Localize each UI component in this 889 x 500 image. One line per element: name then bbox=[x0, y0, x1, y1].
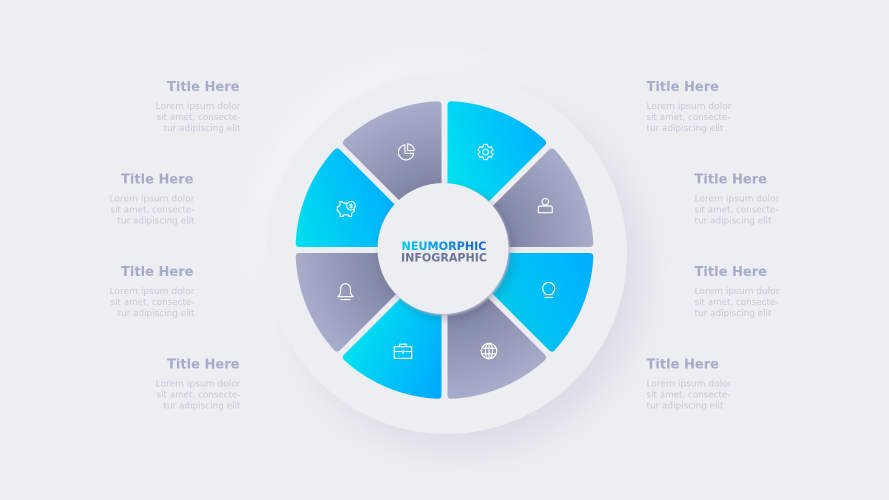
text block: right 3 bbox=[694, 265, 780, 319]
text block: left 4: sit amet, consecte- bbox=[156, 390, 240, 400]
text block: right 4 bbox=[646, 358, 732, 412]
text block: right 1: Lorem ipsum dolor bbox=[646, 102, 732, 112]
text block: left 3 bbox=[110, 265, 195, 319]
text block: right 4: Title Here bbox=[646, 358, 719, 372]
center title bbox=[401, 240, 487, 265]
text block: right 3: tur adipiscing elit bbox=[694, 309, 772, 319]
text block: right 4: Lorem ipsum dolor bbox=[646, 380, 732, 390]
text block: right 2: Title Here bbox=[694, 172, 767, 188]
text block: left 4 bbox=[156, 358, 241, 412]
center title: INFOGRAPHIC bbox=[401, 252, 487, 265]
text block: left 2: Lorem ipsum dolor bbox=[110, 194, 195, 204]
text block: right 2: tur adipiscing elit bbox=[694, 216, 772, 226]
text block: right 2: sit amet, consecte- bbox=[694, 206, 778, 216]
text block: right 2 bbox=[694, 172, 780, 226]
center title: NEUMORPHIC bbox=[402, 240, 486, 253]
icon: piggy bank bbox=[337, 201, 355, 216]
text block: left 1: sit amet, consecte- bbox=[156, 113, 240, 123]
text block: right 1: Title Here bbox=[646, 80, 719, 95]
icon: bell bbox=[338, 284, 353, 300]
text block: right 4: tur adipiscing elit bbox=[646, 402, 724, 412]
text block: right 3: Lorem ipsum dolor bbox=[694, 287, 780, 297]
text block: left 3: Title Here bbox=[121, 265, 194, 280]
text block: left 1: Title Here bbox=[167, 80, 240, 95]
icon: piggy bank: $ bbox=[349, 203, 353, 210]
text block: right 1 bbox=[646, 80, 732, 134]
icon: person bbox=[538, 198, 552, 213]
segment: pie chart, gray bbox=[343, 101, 442, 243]
text block: left 4: Lorem ipsum dolor bbox=[156, 380, 241, 390]
text block: right 2: Lorem ipsum dolor bbox=[694, 194, 780, 204]
segment: briefcase, cyan bbox=[343, 257, 442, 399]
panel: outer neumorphic disc bbox=[250, 57, 642, 450]
segment: gear, cyan bbox=[448, 101, 546, 243]
text block: left 1: Lorem ipsum dolor bbox=[156, 102, 241, 112]
segment: bell, gray bbox=[296, 253, 437, 352]
segment: light bulb, cyan bbox=[452, 253, 593, 352]
icon: gear bbox=[478, 144, 493, 160]
text block: left 3: tur adipiscing elit bbox=[118, 309, 195, 319]
segment: person, gray bbox=[452, 148, 593, 247]
text block: right 3: sit amet, consecte- bbox=[694, 298, 778, 308]
icon: globe bbox=[481, 343, 497, 359]
icon: pie chart bbox=[398, 144, 414, 160]
text block: left 2: sit amet, consecte- bbox=[110, 206, 194, 216]
icon: briefcase bbox=[394, 344, 412, 358]
text block: left 1: tur adipiscing elit bbox=[164, 124, 241, 134]
text block: left 2: tur adipiscing elit bbox=[118, 216, 195, 226]
text block: left 2: Title Here bbox=[121, 172, 194, 188]
segment: piggy bank, cyan bbox=[296, 148, 437, 247]
text block: left 4: Title Here bbox=[167, 358, 240, 372]
text block: left 3: sit amet, consecte- bbox=[110, 298, 194, 308]
text block: right 3: Title Here bbox=[694, 265, 767, 280]
text block: left 2 bbox=[110, 172, 195, 226]
segment: globe, gray bbox=[448, 257, 546, 399]
panel: center disc bbox=[378, 183, 513, 319]
text block: left 4: tur adipiscing elit bbox=[164, 402, 241, 412]
text block: right 1: tur adipiscing elit bbox=[646, 124, 724, 134]
text block: right 1: sit amet, consecte- bbox=[646, 113, 730, 123]
text block: left 3: Lorem ipsum dolor bbox=[110, 287, 195, 297]
text block: right 4: sit amet, consecte- bbox=[646, 390, 730, 400]
text block: left 1 bbox=[156, 80, 241, 134]
icon: light bulb bbox=[543, 282, 555, 297]
